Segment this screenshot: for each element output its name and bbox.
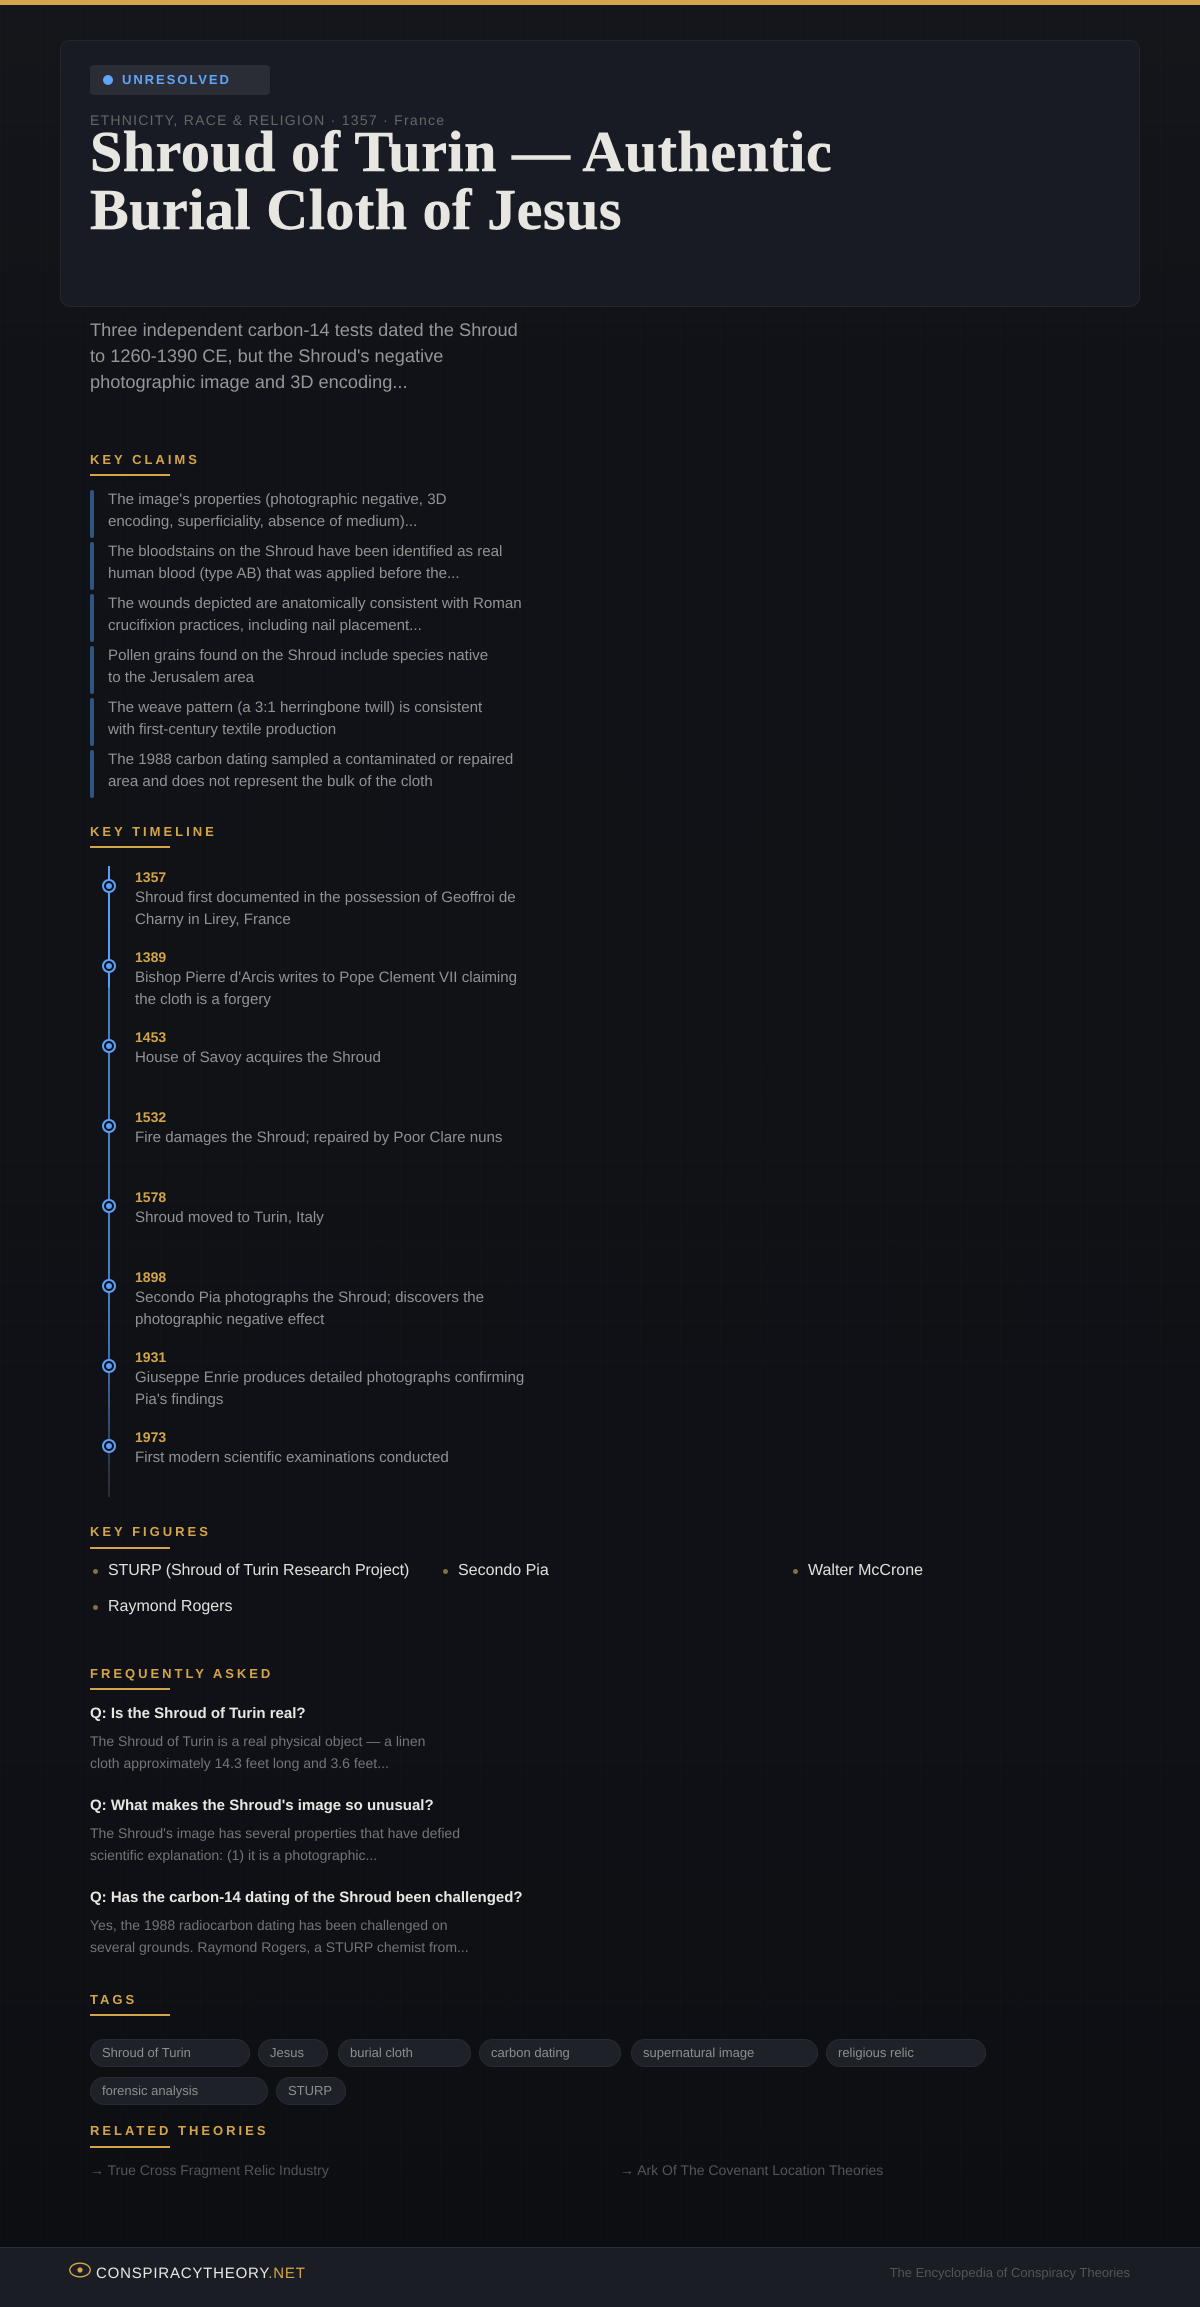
event 1453: House of Savoy acquires the Shroud: [135, 1049, 381, 1066]
tag: forensic analysis: [102, 2083, 198, 2098]
figure: STURP: STURP (Shroud of Turin Research Project): [108, 1562, 409, 1579]
event 1357: [102, 869, 516, 928]
timeline spine: [108, 866, 110, 1497]
event 1389: [102, 949, 517, 1008]
tag: [90, 2077, 268, 2105]
claim 6: area and does not represent the bulk of the cloth: [108, 773, 433, 790]
category and date line: ETHNICITY, RACE & RELIGION · 1357 · France: [90, 112, 445, 128]
panel: hero header: [60, 40, 1140, 307]
tag: [826, 2039, 986, 2067]
FAQ 3: several grounds. Raymond Rogers, a STURP chemist from...: [90, 1939, 469, 1955]
event 1578: 1578: [135, 1189, 166, 1205]
event 1532: 1532: [135, 1109, 166, 1125]
tag: [258, 2039, 328, 2067]
FAQ 3: Yes, the 1988 radiocarbon dating has been challenged on: [90, 1917, 448, 1933]
panel: key claims list: [90, 490, 522, 798]
figure: Raymond Rogers: Raymond Rogers: [108, 1598, 232, 1615]
FAQ 1: cloth approximately 14.3 feet long and 3.6 feet...: [90, 1755, 389, 1771]
status badge: unresolved: [90, 65, 270, 95]
event 1931: [102, 1349, 524, 1408]
event 1898: photographic negative effect: [135, 1311, 324, 1328]
FAQ 1: [90, 1705, 425, 1771]
event 1389: the cloth is a forgery: [135, 991, 271, 1008]
event 1931: 1931: [135, 1349, 166, 1365]
event 1931: Giuseppe Enrie produces detailed photographs confirming: [135, 1369, 524, 1386]
tag: burial cloth: [350, 2045, 413, 2060]
icon: eye logo: [69, 2262, 91, 2278]
claim 3: [90, 594, 522, 642]
claim 2: [90, 542, 502, 590]
event 1389: Bishop Pierre d'Arcis writes to Pope Clement VII claiming: [135, 969, 517, 986]
event 1357: Charny in Lirey, France: [135, 911, 291, 928]
claim 1: The image's properties (photographic negative, 3D: [108, 491, 446, 508]
title: Burial Cloth of Jesus: [90, 177, 622, 242]
event 1973: [102, 1429, 449, 1466]
tag: STURP: [288, 2083, 332, 2098]
heading: frequently asked: FREQUENTLY ASKED: [90, 1666, 273, 1681]
claim 6: The 1988 carbon dating sampled a contaminated or repaired: [108, 751, 513, 768]
event 1931: Pia's findings: [135, 1391, 223, 1408]
related link 2: → Ark Of The Covenant Location Theories: [620, 2162, 883, 2178]
claim 6: [90, 750, 513, 798]
footer tagline: The Encyclopedia of Conspiracy Theories: [890, 2265, 1130, 2280]
FAQ 2: Q: What makes the Shroud's image so unusual?: [90, 1797, 434, 1814]
heading: key figures: KEY FIGURES: [90, 1524, 211, 1539]
event 1973: First modern scientific examinations conducted: [135, 1449, 449, 1466]
claim 2: The bloodstains on the Shroud have been identified as real: [108, 543, 502, 560]
claim 5: [90, 698, 482, 746]
panel: key figures list: [93, 1562, 923, 1615]
summary text: Three independent carbon-14 tests dated the Shroud: [90, 320, 518, 340]
panel: footer: [0, 2247, 1200, 2307]
event 1898: [102, 1269, 484, 1328]
event 1357: 1357: [135, 869, 166, 885]
claim 1: [90, 490, 446, 538]
tag: Jesus: [270, 2045, 304, 2060]
tag: supernatural image: [643, 2045, 754, 2060]
claim 4: Pollen grains found on the Shroud include species native: [108, 647, 488, 664]
claim 3: The wounds depicted are anatomically consistent with Roman: [108, 595, 522, 612]
panel: FAQ: [90, 1705, 523, 1955]
claim 5: with first-century textile production: [108, 721, 336, 738]
event 1973: 1973: [135, 1429, 166, 1445]
FAQ 1: The Shroud of Turin is a real physical object — a linen: [90, 1733, 425, 1749]
event 1532: Fire damages the Shroud; repaired by Poor Clare nuns: [135, 1129, 502, 1146]
claim 1: encoding, superficiality, absence of medium)...: [108, 513, 417, 530]
event 1389: 1389: [135, 949, 166, 965]
FAQ 2: The Shroud's image has several properties that have defied: [90, 1825, 460, 1841]
summary text: [90, 320, 518, 392]
summary text: photographic image and 3D encoding...: [90, 372, 408, 392]
heading: key claims: KEY CLAIMS: [90, 452, 200, 467]
FAQ 1: Q: Is the Shroud of Turin real?: [90, 1705, 306, 1722]
tag: [631, 2039, 818, 2067]
heading: key timeline: KEY TIMELINE: [90, 824, 217, 839]
claim 5: The weave pattern (a 3:1 herringbone twill) is consistent: [108, 699, 482, 716]
title: [90, 119, 832, 242]
panel: timeline: [102, 866, 524, 1497]
tag: [338, 2039, 471, 2067]
claim 4: [90, 646, 488, 694]
claim 2: human blood (type AB) that was applied before the...: [108, 565, 460, 582]
claim 3: crucifixion practices, including nail placement...: [108, 617, 422, 634]
tag: Shroud of Turin: [102, 2045, 191, 2060]
panel: tags: [90, 2039, 986, 2105]
event 1898: 1898: [135, 1269, 166, 1285]
tag: carbon dating: [491, 2045, 570, 2060]
event 1453: 1453: [135, 1029, 166, 1045]
tag: [479, 2039, 621, 2067]
badge label: UNRESOLVED: [122, 72, 231, 87]
FAQ 2: [90, 1797, 460, 1863]
event 1898: Secondo Pia photographs the Shroud; discovers the: [135, 1289, 484, 1306]
heading: tags: TAGS: [90, 1992, 137, 2007]
claim 4: to the Jerusalem area: [108, 669, 254, 686]
FAQ 3: Q: Has the carbon-14 dating of the Shroud been challenged?: [90, 1889, 523, 1906]
figure: Walter McCrone: Walter McCrone: [808, 1562, 923, 1579]
figure: Secondo Pia: Secondo Pia: [458, 1562, 549, 1579]
icon: status dot: [103, 75, 113, 85]
event 1357: Shroud first documented in the possession of Geoffroi de: [135, 889, 516, 906]
FAQ 2: scientific explanation: (1) it is a photographic...: [90, 1847, 377, 1863]
tag: religious relic: [838, 2045, 914, 2060]
title: Shroud of Turin — Authentic: [90, 119, 832, 184]
brand wordmark: CONSPIRACYTHEORY.NET: [96, 2265, 306, 2282]
related link 1: → True Cross Fragment Relic Industry: [90, 2162, 329, 2178]
event 1578: [102, 1189, 324, 1226]
top accent bar: [0, 0, 1200, 5]
tag: [276, 2077, 346, 2105]
tag: [90, 2039, 250, 2067]
event 1453: [102, 1029, 381, 1066]
heading: related theories: RELATED THEORIES: [90, 2123, 268, 2138]
FAQ 3: [90, 1889, 523, 1955]
summary text: to 1260-1390 CE, but the Shroud's negative: [90, 346, 443, 366]
event 1532: [102, 1109, 502, 1146]
event 1578: Shroud moved to Turin, Italy: [135, 1209, 324, 1226]
